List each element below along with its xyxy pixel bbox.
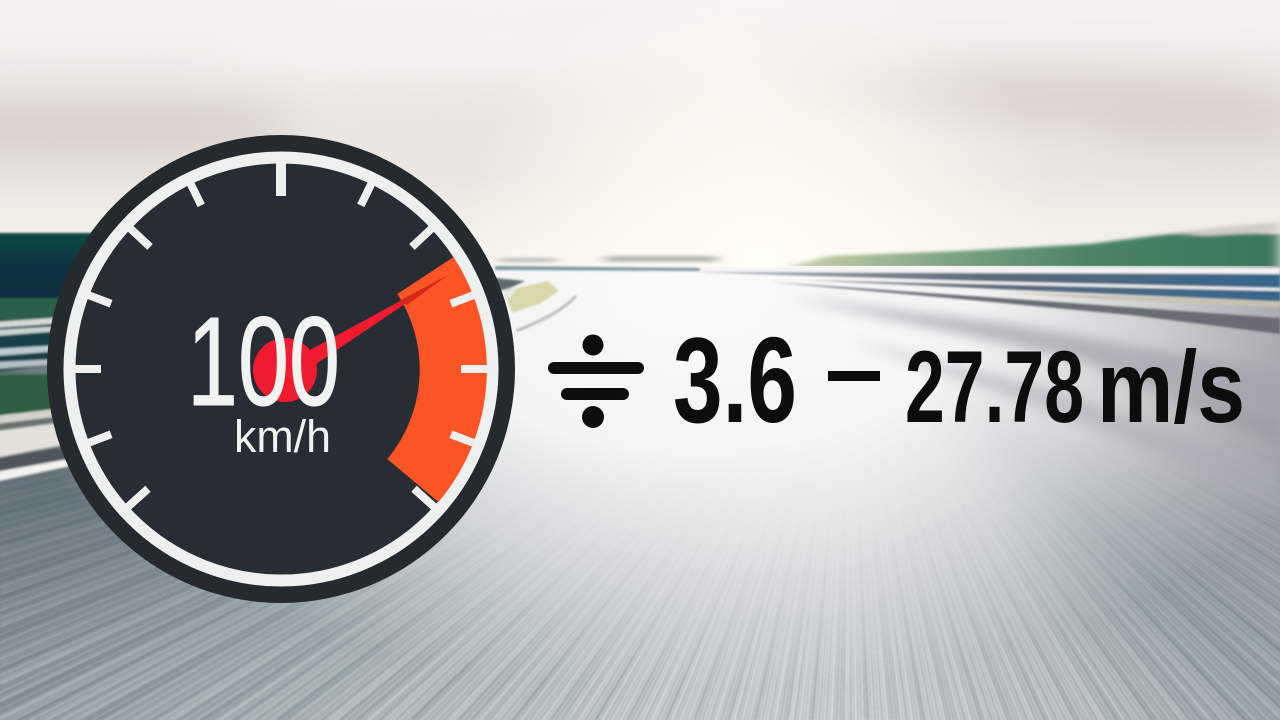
equals dash — [828, 371, 880, 381]
icon: divide sign — [548, 334, 644, 428]
result value: 27.78 — [905, 330, 1084, 444]
tick marks — [75, 163, 487, 507]
divisor value: 3.6 — [673, 312, 797, 448]
gauge dial: bezel, ring and face — [47, 135, 515, 603]
result value: m/s — [1097, 330, 1245, 444]
speed value: 100 — [187, 291, 340, 432]
orange red-zone arc — [387, 257, 487, 502]
red needle and hub — [253, 275, 448, 402]
speed unit: km/h — [234, 411, 331, 462]
background: blurred road surface — [0, 266, 1280, 720]
